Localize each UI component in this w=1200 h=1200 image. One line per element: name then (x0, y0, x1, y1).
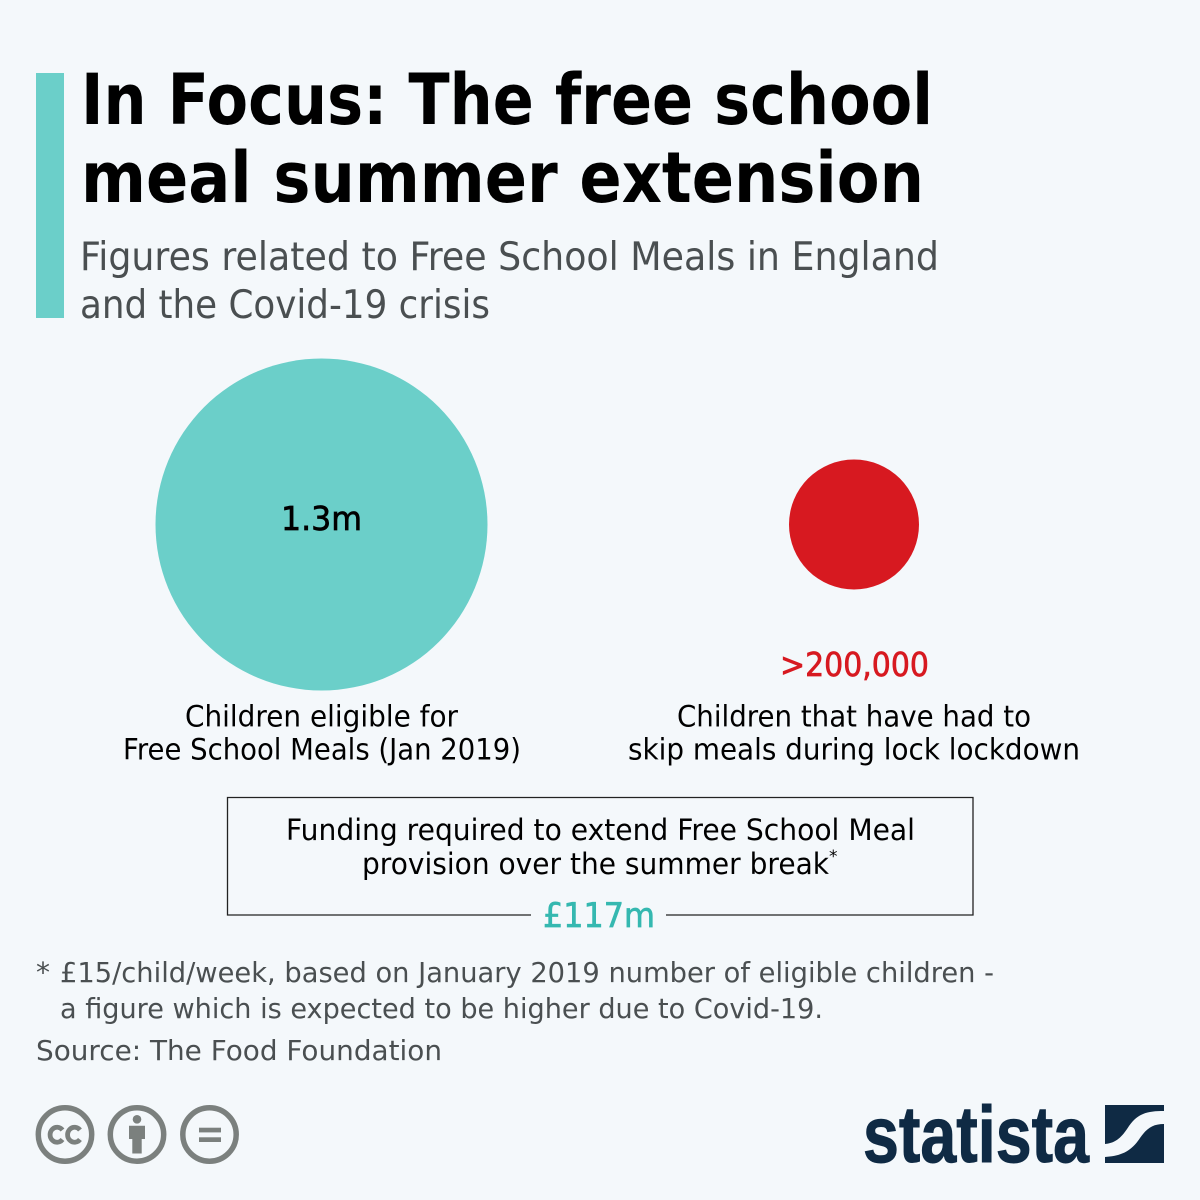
icon: creative commons (38, 1108, 92, 1161)
icon: attribution (110, 1108, 164, 1161)
circle: eligible children: 1.3m (281, 499, 362, 538)
title: meal summer extension (81, 137, 924, 219)
accent bar (36, 73, 64, 318)
label: eligible children: Free School Meals (Jan 2019) (123, 732, 521, 766)
circle: eligible children (156, 358, 488, 690)
subtitle: and the Covid-19 crisis (80, 283, 490, 328)
subtitle (80, 235, 939, 328)
logo: statista: statista (863, 1090, 1089, 1179)
funding description: provision over the summer break (362, 847, 829, 881)
title: In Focus: The free school (81, 59, 933, 141)
subtitle: Figures related to Free School Meals in England (80, 235, 939, 280)
funding description: * (829, 847, 838, 867)
funding description (286, 813, 915, 881)
source: Source: The Food Foundation (36, 1034, 442, 1067)
funding description: Funding required to extend Free School Meal (286, 813, 915, 847)
footnote: a figure which is expected to be higher due to Covid-19. (60, 992, 823, 1025)
title (81, 59, 933, 219)
footnote (36, 956, 994, 1025)
funding value: £117m (543, 896, 655, 936)
label: children skipping meals: Children that have had to (677, 700, 1031, 734)
label: children skipping meals: skip meals during lock lockdown (628, 732, 1080, 766)
footnote: * (36, 956, 50, 989)
label: eligible children (123, 700, 521, 766)
circle: children skipping meals (789, 460, 919, 590)
panel: funding box (228, 798, 973, 936)
label: children skipping meals (628, 700, 1080, 766)
value: children skipping meals: >200,000 (780, 645, 929, 684)
label: eligible children: Children eligible for (185, 700, 458, 734)
icon: no derivatives (183, 1108, 236, 1161)
icon: statista mark (1105, 1105, 1164, 1163)
footnote: £15/child/week, based on January 2019 number of eligible children - (60, 956, 994, 989)
